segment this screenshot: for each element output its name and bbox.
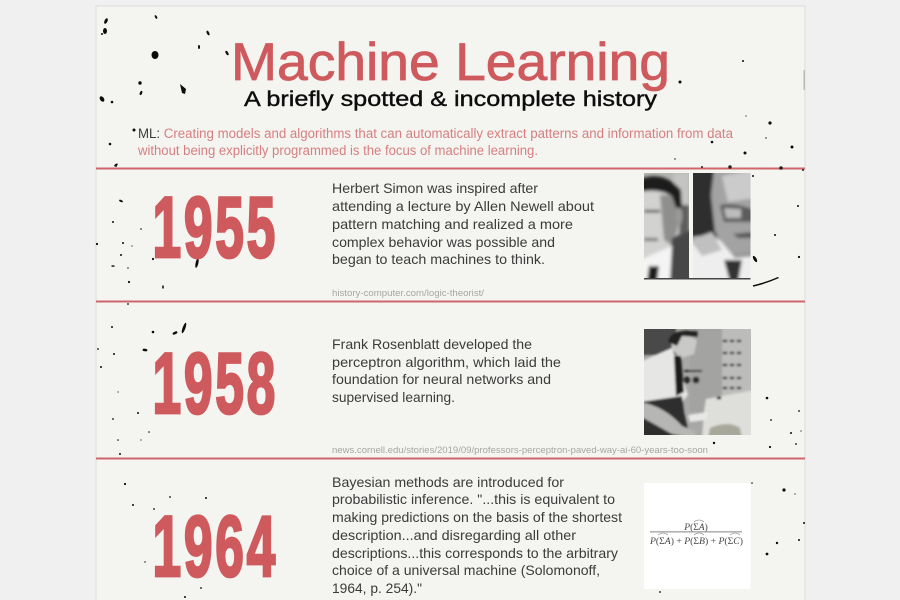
description 1964: 1964, p. 254)." [332,580,422,596]
fraction bar [650,530,742,533]
description 1955: Herbert Simon was inspired after [332,180,538,196]
scrollbar tick [804,70,805,90]
definition text block: ML: Creating models and algorithms that can automatically extract patterns and information from data [138,126,733,141]
description 1964: making predictions on the basis of the shortest [332,509,622,525]
section: 1955 [152,170,754,299]
description 1964: probabilistic inference. "...this is equivalent to [332,491,615,507]
section: 1958 [152,325,755,456]
portrait: younger man [644,173,689,278]
description 1964: choice of a universal machine (Solomonoff, [332,562,600,578]
description 1955 [332,180,594,267]
photo: man at perceptron machine [644,329,751,435]
hats over terms [658,520,740,535]
description 1958: foundation for neural networks and [332,371,551,387]
formula numerator: P(ΣA) [683,522,708,533]
formula denominator: P(ΣA) + P(ΣB) + P(ΣC) [649,536,743,547]
year 1964: 1964 [152,500,278,595]
specks over first divider [115,165,804,171]
description 1955: pattern matching and realized a more [332,216,573,232]
description 1955: complex behavior was possible and [332,234,555,250]
formula image [644,483,750,589]
description 1964 [332,474,622,596]
definition text block [137,126,733,158]
description 1958: supervised learning. [332,389,455,405]
year 1958: 1958 [152,337,278,432]
panel: poster background [96,6,805,600]
description 1964: Bayesian methods are introduced for [332,474,564,490]
photo baseline [644,278,750,280]
source 1958: news.cornell.edu/stories/2019/09/professors-perceptron-paved-way-ai-60-years-too-soon [332,445,708,456]
scatter of ink specks [96,15,805,598]
description 1955: began to teach machines to think. [332,251,545,267]
description 1955: attending a lecture by Allen Newell about [332,198,594,214]
description 1964: descriptions...this corresponds to the arbitrary [332,545,618,561]
infographic page [96,6,806,600]
source 1955: history-computer.com/logic-theorist/ [332,288,484,299]
description 1958: Frank Rosenblatt developed the [332,336,532,352]
description 1958 [332,336,561,405]
photo: two portraits [644,173,750,280]
year 1955: 1955 [152,181,278,276]
description 1964: description...and disregarding all other [332,527,576,543]
section: 1964 [152,474,750,596]
title: Machine Learning [231,33,670,92]
definition text block: without being explicitly programmed is the focus of machine learning. [137,143,538,158]
description 1958: perceptron algorithm, which laid the [332,354,561,370]
subtitle: A briefly spotted & incomplete history [244,87,657,111]
portrait: older man [693,173,750,278]
dividers [96,168,805,460]
